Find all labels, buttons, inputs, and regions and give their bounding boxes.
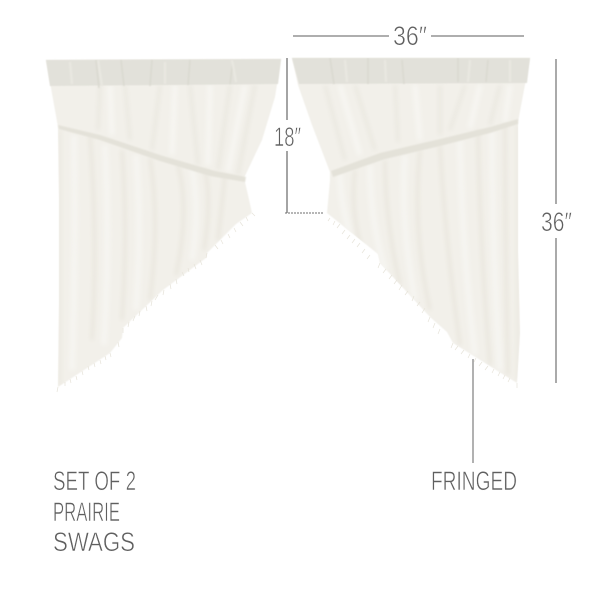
text block: set of 2 prairie swags: PRAIRIE [53,497,120,527]
text block: set of 2 prairie swags: SWAGS [53,527,135,557]
right curtain folds [358,237,399,283]
dimension: length 36 inches: 36″ [541,207,572,237]
text block: set of 2 prairie swags: SET OF 2 [53,466,136,496]
left curtain body [46,59,281,387]
right curtain fringe [328,218,517,388]
callout: fringed [431,359,517,496]
right curtain gathered tie [331,119,518,177]
callout: fringed: FRINGED [431,466,517,496]
panel: left curtain swag [46,59,281,392]
dimension: drop 18 inches: 18″ [274,122,301,152]
right curtain body [292,58,530,383]
right curtain top band [292,58,530,84]
panel: right curtain swag [292,58,530,388]
dimension: top width 36 inches: 36″ [393,21,427,51]
left band gathers [98,84,151,88]
infographic canvas [46,26,572,551]
right band gathers [404,83,405,84]
left curtain top band [46,59,281,86]
left curtain gathered tie [58,125,246,182]
left curtain folds [60,85,255,385]
text block: set of 2 prairie swags [53,466,136,557]
left curtain fringe [57,213,255,392]
